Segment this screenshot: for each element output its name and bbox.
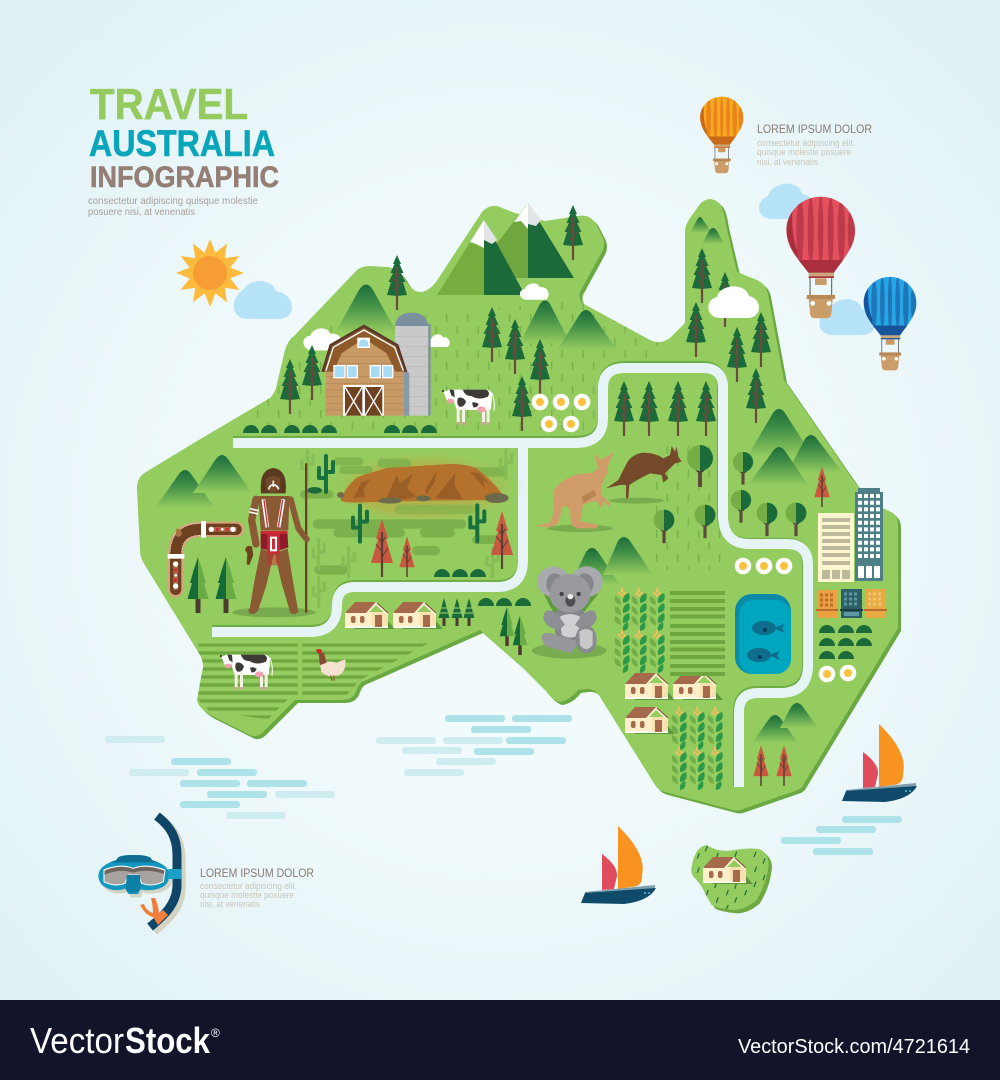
text block: bottom lorem: LOREM IPSUM DOLOR [200, 866, 314, 880]
kangaroo brown [606, 446, 682, 504]
text block: top right lorem: nisi, at venenatis [757, 157, 818, 167]
chicken [316, 649, 346, 681]
mountains: gradient hills [155, 217, 843, 743]
flowers [532, 394, 856, 682]
houses [345, 602, 723, 734]
footer logo: Vector [30, 1020, 124, 1061]
loin cloth [261, 531, 288, 550]
text block: bottom lorem: consectetur adipiscing elit. [200, 881, 297, 891]
island [691, 845, 772, 913]
title [89, 80, 279, 194]
title: INFOGRAPHIC [90, 161, 279, 194]
shrubs [243, 425, 872, 659]
water dashes centre [376, 715, 572, 776]
farm field [193, 643, 436, 719]
hair [261, 468, 286, 493]
city buildings [816, 488, 887, 618]
text block: top right lorem: quisque molestie posuere [757, 147, 851, 157]
icon: blue cloud right [819, 299, 876, 335]
rocks [337, 492, 509, 504]
footer logo: Stock [125, 1020, 211, 1061]
kangaroo tan [535, 453, 613, 532]
uluru and outback [300, 448, 523, 575]
duo-tone pines [188, 557, 527, 655]
snorkel and mask [98, 816, 182, 931]
uluru rock [341, 464, 502, 503]
body paint [263, 499, 283, 527]
clouds over land [303, 283, 549, 350]
subtitle text [88, 196, 258, 218]
red pine trees [371, 466, 830, 786]
body [248, 496, 307, 614]
footer logo: ® [211, 1026, 220, 1040]
text block: bottom lorem: quisque molestie posuere [200, 890, 294, 900]
title: TRAVEL [90, 80, 248, 129]
pond with fish [735, 594, 791, 674]
silo [395, 313, 431, 416]
sailboat right [842, 724, 917, 802]
hot air balloon: orange [699, 96, 745, 173]
cloud over pine [708, 286, 759, 318]
shadow [232, 607, 316, 617]
island house [703, 857, 753, 884]
outback ground bars [300, 457, 507, 575]
sailboat bottom [581, 826, 656, 904]
roads [212, 366, 808, 787]
water dashes left [105, 736, 335, 819]
water dashes right [781, 816, 902, 855]
mountains: snow capped [437, 203, 574, 295]
koala [532, 566, 607, 659]
barn body [323, 326, 409, 416]
small striped pines [438, 598, 474, 626]
text block: top right lorem: consectetur adipiscing elit. [757, 138, 855, 148]
text block: top right lorem: LOREM IPSUM DOLOR [757, 122, 872, 136]
tower [855, 488, 883, 581]
hot air balloon: red [784, 195, 857, 318]
mask [98, 855, 182, 897]
icon: blue cloud left [234, 281, 292, 319]
cacti [302, 450, 512, 607]
hand-held boomerang [245, 546, 253, 565]
small buildings [816, 589, 887, 618]
map land [137, 199, 898, 810]
footer url: VectorStock.com/4721614 [738, 1036, 970, 1058]
map edge [140, 202, 901, 814]
boomerang [168, 521, 237, 590]
footer bar [0, 1000, 1000, 1080]
staff [305, 463, 307, 613]
office block [818, 513, 854, 582]
corn crops [615, 587, 723, 790]
icon: sun [176, 239, 244, 307]
pine trees [280, 205, 771, 436]
barn [323, 313, 431, 416]
round trees [654, 445, 806, 543]
subtitle text: consectetur adipiscing quisque molestie [88, 196, 258, 207]
ploughed field [670, 591, 725, 676]
hot air balloon: blue [862, 276, 918, 370]
subtitle text: posuere nisi, at venenatis [88, 207, 195, 218]
text block: top right lorem [757, 122, 872, 167]
cow upper [442, 389, 494, 425]
mouthpiece [140, 898, 168, 925]
icon: blue cloud top [759, 184, 814, 219]
title: AUSTRALIA [89, 123, 275, 164]
text block: bottom lorem [200, 866, 314, 909]
map of Australia [137, 199, 901, 814]
cow lower [220, 654, 272, 690]
aboriginal man [232, 463, 316, 617]
grass ticks [250, 298, 722, 570]
snorkel tube [150, 816, 181, 931]
text block: bottom lorem: nisi, at venenatis [200, 899, 260, 909]
